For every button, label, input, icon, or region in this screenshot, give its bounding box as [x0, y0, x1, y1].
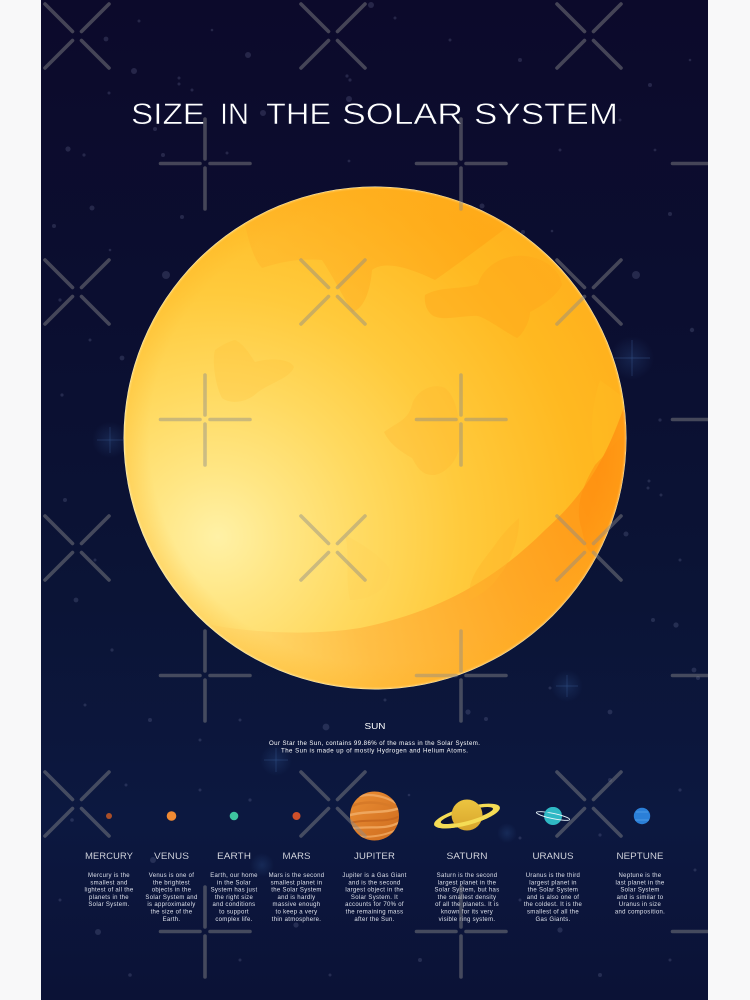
- venus description: the size of the: [151, 910, 193, 916]
- planet: mars: [269, 812, 324, 923]
- mars description: massive enough: [273, 902, 320, 908]
- venus description: Solar System and: [145, 895, 198, 901]
- saturn label: SATURN: [446, 851, 488, 861]
- earth description: [210, 873, 258, 923]
- earth description: in the Solar: [217, 880, 251, 886]
- icon: uranus: [536, 807, 570, 825]
- title: SIZE: [131, 98, 205, 131]
- venus label: VENUS: [154, 851, 189, 861]
- venus description: Earth.: [163, 917, 180, 923]
- earth description: System has just: [211, 888, 257, 894]
- jupiter description: [342, 873, 407, 923]
- sun heading: SUN: [364, 721, 386, 731]
- uranus description: largest planet in: [529, 880, 577, 886]
- mars description: Mars is the second: [269, 873, 324, 879]
- mercury description: smallest and: [90, 880, 128, 886]
- mercury description: Solar System.: [88, 902, 130, 908]
- uranus description: the coldest. It is the: [524, 902, 583, 908]
- uranus label: URANUS: [532, 851, 574, 861]
- uranus description: the Solar System: [528, 888, 578, 894]
- mars description: to keep a very: [276, 910, 317, 916]
- mercury description: lightest of all the: [84, 888, 134, 894]
- venus description: is approximately: [147, 902, 196, 908]
- saturn description: of all the planets. It is: [435, 902, 499, 908]
- sun description: Our Star the Sun, contains 99.86% of the mass in the Solar System.: [269, 740, 480, 747]
- icon: mars: [292, 812, 300, 820]
- planet: earth: [210, 812, 258, 923]
- jupiter description: and is the second: [348, 880, 401, 886]
- mars description: [269, 873, 324, 923]
- earth label: EARTH: [217, 851, 251, 861]
- venus description: [145, 873, 198, 923]
- planet: uranus: [524, 807, 583, 923]
- mercury description: [84, 873, 134, 908]
- planet: mercury: [84, 813, 134, 908]
- icon: neptune: [634, 808, 650, 824]
- neptune description: [615, 873, 665, 916]
- saturn description: Saturn is the second: [437, 873, 497, 879]
- uranus description: smallest of all the: [527, 910, 579, 916]
- icon: saturn: [434, 800, 500, 830]
- uranus description: Uranus is the third: [526, 873, 580, 879]
- saturn description: [434, 873, 500, 923]
- jupiter description: largest object in the: [345, 888, 404, 894]
- saturn description: Solar System, but has: [434, 888, 500, 894]
- neptune description: Neptune is the: [619, 873, 662, 879]
- saturn description: the smallest density: [438, 895, 496, 901]
- title: SOLAR: [342, 98, 463, 131]
- neptune description: and composition.: [615, 910, 665, 916]
- mars description: thin atmosphere.: [272, 917, 321, 923]
- earth description: complex life.: [215, 917, 253, 923]
- title: IN: [220, 98, 249, 131]
- earth description: and conditions: [213, 902, 255, 908]
- neptune label: NEPTUNE: [616, 851, 664, 861]
- mercury description: planets in the: [89, 895, 129, 901]
- planet: neptune: [615, 808, 665, 916]
- mars label: MARS: [282, 851, 310, 861]
- mars description: and is hardly: [278, 895, 315, 901]
- title: THE: [266, 98, 331, 131]
- jupiter description: Solar System. It: [351, 895, 398, 901]
- venus description: Venus is one of: [149, 873, 194, 879]
- icon: jupiter: [350, 792, 400, 843]
- planet: saturn: [432, 799, 502, 923]
- mercury description: Mercury is the: [88, 873, 130, 879]
- neptune description: Solar System: [620, 888, 660, 894]
- uranus description: Gas Giants.: [536, 917, 571, 923]
- jupiter label: JUPITER: [354, 851, 396, 861]
- jupiter description: Jupiter is a Gas Giant: [342, 873, 407, 879]
- neptune description: and is similar to: [617, 895, 664, 901]
- icon: venus: [167, 811, 176, 821]
- icon: mercury: [106, 813, 112, 819]
- planet: jupiter: [342, 792, 407, 923]
- saturn description: largest planet in the: [438, 880, 497, 886]
- neptune description: Uranus in size: [619, 902, 661, 908]
- uranus description: and is also one of: [527, 895, 579, 901]
- saturn description: visible ring system.: [439, 917, 495, 923]
- mars description: smallest planet in: [271, 880, 322, 886]
- jupiter description: after the Sun.: [354, 917, 395, 923]
- earth description: to support: [219, 910, 249, 916]
- sun description: [269, 740, 480, 754]
- venus description: the brightest: [153, 880, 190, 886]
- venus description: objects in the: [152, 888, 192, 894]
- title: SYSTEM: [474, 98, 618, 131]
- planet: venus: [145, 811, 198, 923]
- saturn description: known for its very: [441, 910, 493, 916]
- sun description: The Sun is made up of mostly Hydrogen and Helium Atoms.: [281, 747, 468, 754]
- mercury label: MERCURY: [85, 851, 133, 861]
- neptune description: last planet in the: [615, 880, 665, 886]
- mars description: the Solar System: [271, 888, 322, 894]
- earth description: Earth, our home: [210, 873, 258, 879]
- icon: earth: [230, 812, 238, 820]
- glowing blue stars: [92, 336, 654, 877]
- jupiter description: accounts for 70% of: [345, 902, 404, 908]
- earth description: the right size: [215, 895, 253, 901]
- jupiter description: the remaining mass: [346, 910, 403, 916]
- sun: [124, 186, 626, 690]
- uranus description: [524, 873, 583, 923]
